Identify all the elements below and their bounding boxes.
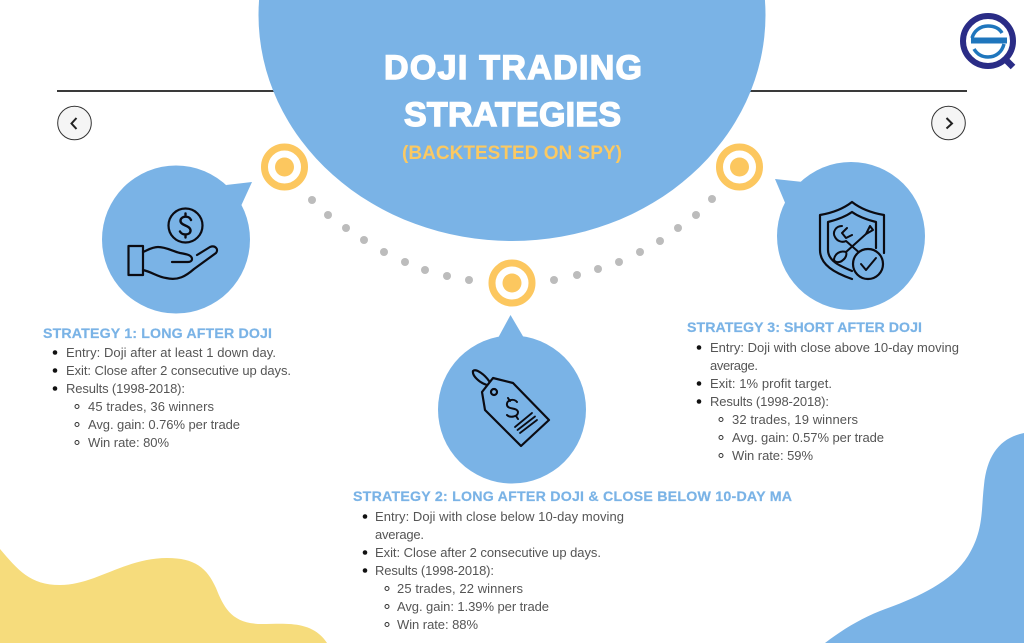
bubble 1	[102, 166, 252, 314]
strategy 3 bullets: Results (1998-2018):	[710, 394, 829, 409]
target marker 1	[264, 147, 304, 187]
decorative yellow blob	[0, 549, 327, 643]
target marker 3	[720, 147, 760, 187]
strategy 3 bullets: Avg. gain: 0.57% per trade	[732, 430, 884, 445]
icon: price tag	[473, 370, 549, 446]
icon: shield with tools and check	[820, 202, 884, 279]
target marker 2	[492, 263, 532, 303]
strategy 1 bullets: 45 trades, 36 winners	[88, 399, 214, 414]
bubble 2	[438, 315, 586, 484]
strategy 1 bullets: Results (1998-2018):	[66, 381, 185, 396]
strategy 2 bullets: Exit: Close after 2 consecutive up days.	[375, 545, 601, 560]
strategy 2 bullets: Entry: Doji with close below 10-day moving	[375, 509, 624, 524]
strategy 1 bullets	[53, 345, 291, 450]
icon: hand holding dollar coin	[128, 208, 217, 279]
strategy 1 heading: STRATEGY 1: LONG AFTER DOJI	[43, 326, 272, 342]
header rule right	[748, 90, 967, 92]
strategy 2 bullets: Win rate: 88%	[397, 617, 478, 632]
next arrow button	[932, 106, 965, 140]
strategy 2 heading: STRATEGY 2: LONG AFTER DOJI & CLOSE BELOW 10-DAY MA	[353, 489, 792, 505]
decorative blue blob	[825, 433, 1024, 643]
header rule left	[57, 90, 277, 92]
strategy 3 bullets	[697, 340, 959, 463]
previous arrow button	[58, 106, 91, 140]
strategy 2 bullets: 25 trades, 22 winners	[397, 581, 524, 596]
connector dots	[308, 195, 716, 284]
strategy 3 bullets: Win rate: 59%	[732, 448, 813, 463]
strategy 2 bullets: Avg. gain: 1.39% per trade	[397, 599, 549, 614]
bubble 3	[775, 162, 925, 310]
strategy 3 bullets: 32 trades, 19 winners	[732, 412, 858, 427]
strategy 2 text block	[353, 489, 792, 632]
strategy 3 bullets: Entry: Doji with close above 10-day moving	[710, 340, 959, 355]
title	[384, 49, 642, 134]
strategy 1 bullets: Win rate: 80%	[88, 435, 169, 450]
title circle	[258, 0, 766, 241]
strategy 3 heading: STRATEGY 3: SHORT AFTER DOJI	[687, 320, 922, 336]
strategy 2 bullets: average.	[375, 527, 424, 542]
strategy 1 bullets: Entry: Doji after at least 1 down day.	[66, 345, 276, 360]
strategy 1 bullets: Exit: Close after 2 consecutive up days.	[66, 363, 291, 378]
strategy 2 bullets: Results (1998-2018):	[375, 563, 494, 578]
strategy 3 bullets: Exit: 1% profit target.	[710, 376, 832, 391]
strategy 3 text block	[687, 320, 959, 463]
title: DOJI TRADING	[384, 49, 642, 87]
logo	[963, 16, 1013, 67]
strategy 1 bullets: Avg. gain: 0.76% per trade	[88, 417, 240, 432]
strategy 3 bullets: average.	[710, 358, 758, 373]
strategy 1 text block	[43, 326, 291, 450]
strategy 2 bullets	[363, 509, 624, 632]
subtitle: (BACKTESTED ON SPY)	[402, 143, 622, 164]
title: STRATEGIES	[404, 96, 621, 134]
